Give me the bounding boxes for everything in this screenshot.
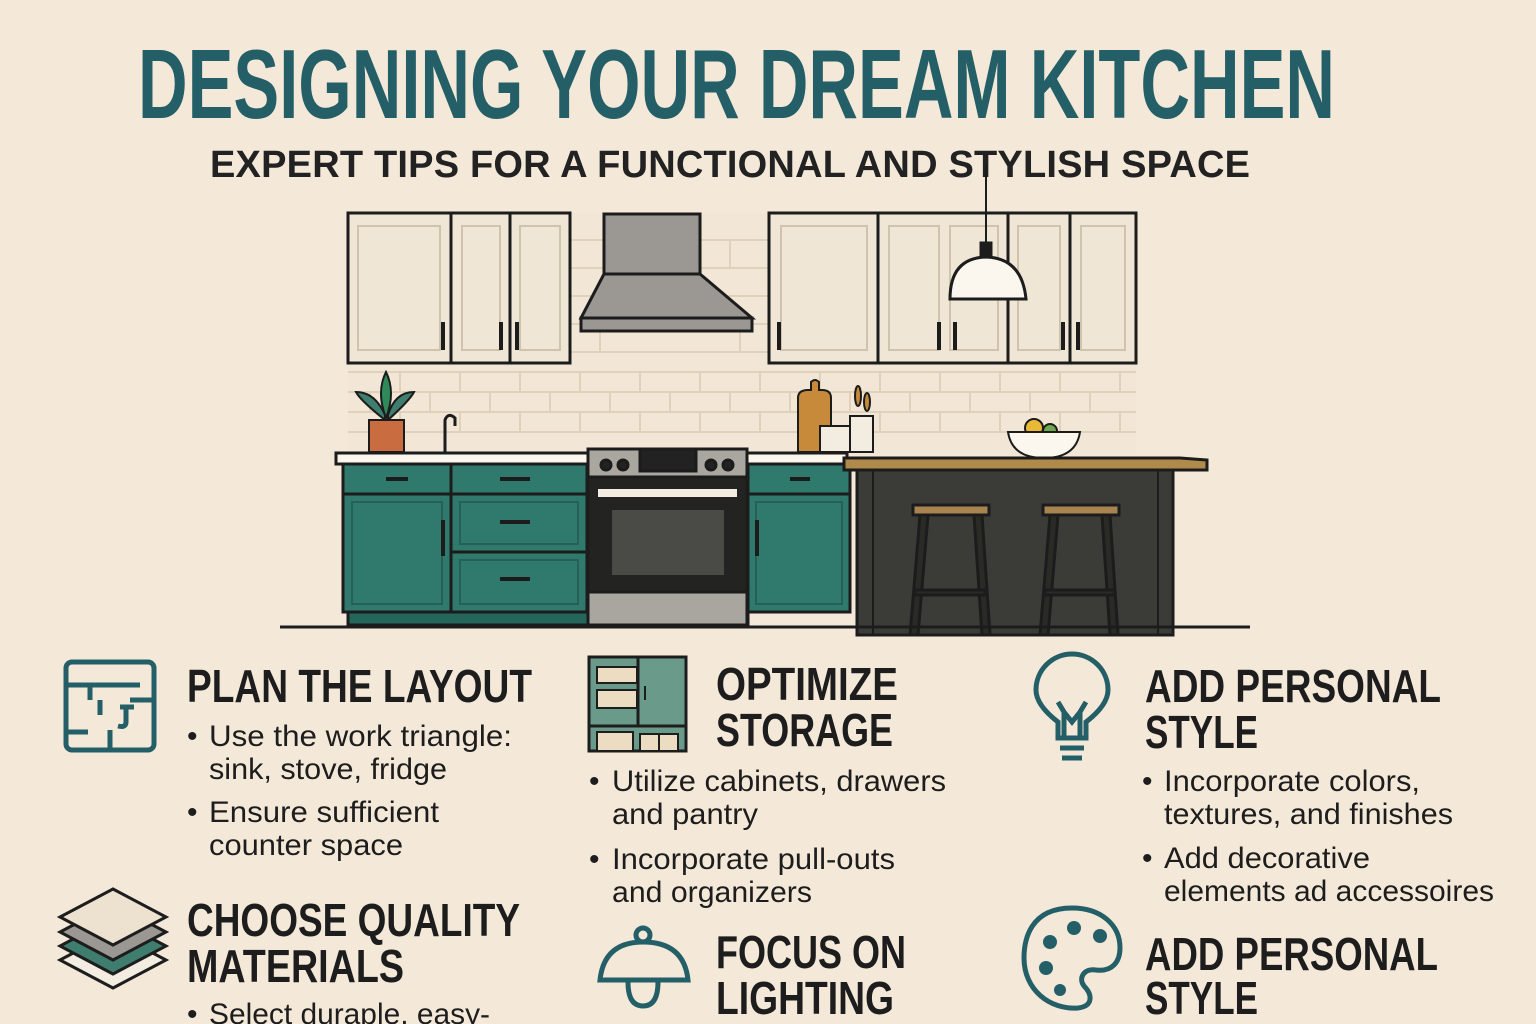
panel: add personal style (1036, 654, 1494, 908)
panel: focus on lighting (600, 926, 906, 1024)
kitchen illustration (280, 165, 1250, 635)
bullets: and pantry (612, 798, 758, 831)
fruit bowl (1008, 419, 1080, 458)
countertops (336, 453, 590, 464)
bullets: Use the work triangle: (209, 720, 512, 753)
panel: add personal style (repeat): STYLE (1145, 972, 1258, 1024)
bullets: • (1142, 765, 1153, 798)
icon: floor plan (66, 662, 154, 750)
base cabinets (343, 464, 850, 625)
bullets: textures, and finishes (1164, 798, 1453, 831)
heading: PLAN THE LAYOUT (187, 660, 532, 712)
icon: light bulb (1036, 654, 1108, 758)
range hood (581, 214, 752, 331)
icon: pantry cabinet (589, 657, 686, 751)
panel: choose quality materials: MATERIALS (187, 940, 404, 992)
heading: CHOOSE QUALITY (187, 894, 520, 946)
subtitle: EXPERT TIPS FOR A FUNCTIONAL AND STYLISH SPACE (210, 144, 1250, 186)
pendant lamp (950, 165, 1026, 299)
bullets: counter space (209, 829, 403, 862)
icon: pendant lamp (600, 928, 688, 1006)
bullets: and organizers (612, 876, 812, 909)
icon: material layers (60, 889, 166, 988)
bullets: • (589, 765, 600, 798)
panel: focus on lighting: LIGHTING (716, 972, 894, 1024)
panel: add personal style (repeat) (1024, 908, 1438, 1024)
bullets (187, 720, 512, 862)
bullets: Add decorative (1164, 842, 1370, 875)
heading: FOCUS ON (716, 926, 906, 978)
icon: palette (1024, 908, 1120, 1008)
cutting board and utensils (798, 380, 873, 452)
panel: choose quality materials (60, 889, 520, 1024)
bullets (589, 765, 946, 909)
plant (356, 372, 414, 452)
backsplash (348, 213, 1136, 455)
heading: ADD PERSONAL (1145, 928, 1438, 980)
bullets: • (187, 796, 198, 829)
stove (588, 449, 747, 625)
bar stools (910, 505, 1119, 635)
island (844, 458, 1207, 635)
heading: OPTIMIZE (716, 658, 898, 710)
panel: plan the layout (66, 660, 532, 862)
upper cabinets left (348, 213, 570, 363)
panel: optimize storage: STORAGE (716, 704, 893, 756)
panel: add personal style: STYLE (1145, 706, 1258, 758)
upper cabinets right (769, 213, 1136, 363)
bullets: Incorporate colors, (1164, 765, 1420, 798)
bullets: Ensure sufficient (209, 796, 440, 829)
bullets: • (187, 720, 198, 753)
heading: ADD PERSONAL (1145, 660, 1441, 712)
panel: optimize storage (589, 657, 946, 909)
floor line (280, 626, 1250, 628)
faucet (445, 415, 455, 452)
bullets: • (589, 843, 600, 876)
bullets: • (1142, 842, 1153, 875)
bullets: Incorporate pull-outs (612, 843, 895, 876)
bullets: elements ad accessoires (1164, 875, 1494, 908)
bullets: sink, stove, fridge (209, 753, 447, 786)
bullets (1142, 765, 1494, 908)
bullets: Utilize cabinets, drawers (612, 765, 946, 798)
